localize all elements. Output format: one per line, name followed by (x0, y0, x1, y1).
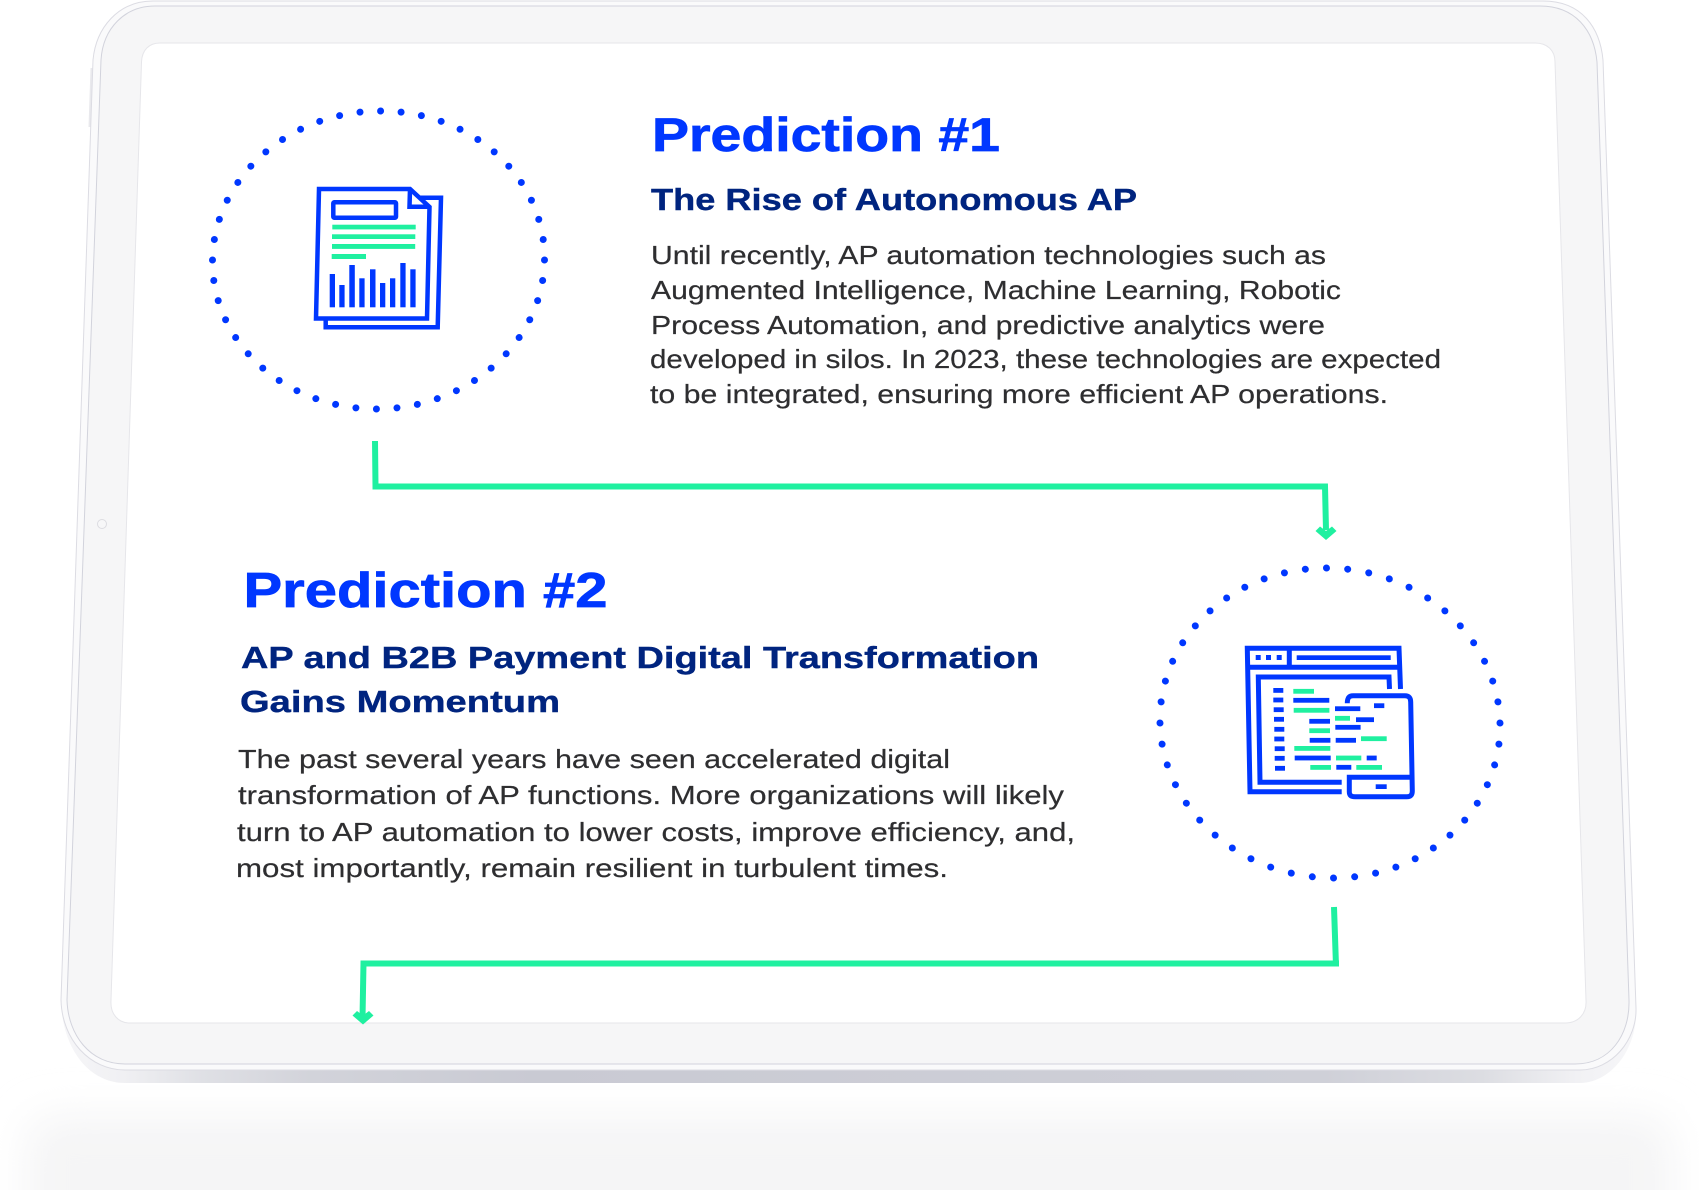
subheading: AP and B2B Payment Digital Transformation Gains Momentum: AP and B2B Payment Digital Transformation (241, 640, 1039, 675)
green code lines (1293, 689, 1387, 770)
body text: prediction 2: transformation of AP functions. More organizations will likely (238, 780, 1064, 810)
bar chart (330, 263, 416, 307)
body text: prediction 1: developed in silos. In 2023, these technologies are expected (650, 344, 1441, 374)
header box (333, 202, 396, 218)
icon: code window with tablet (1247, 648, 1412, 797)
tablet drop shadow (44, 1133, 1654, 1190)
subheading: AP and B2B Payment Digital Transformation Gains Momentum (240, 640, 1039, 719)
green text lines (332, 225, 416, 259)
dotted circle 2 (1156, 568, 1504, 878)
heading: Prediction #1: Prediction #1 (652, 108, 1000, 161)
body text: prediction 1: Process Automation, and predictive analytics were (651, 310, 1325, 340)
inner code panel (1258, 677, 1390, 782)
body text: prediction 1: to be integrated, ensuring more efficient AP operations. (650, 379, 1388, 409)
icon: report document with bar chart (316, 189, 441, 327)
blue code lines (1273, 688, 1384, 771)
body text: prediction 1: Until recently, AP automation technologies such as (651, 240, 1326, 270)
dotted circle 1 (210, 111, 547, 409)
body text: prediction 2: turn to AP automation to lower costs, improve efficiency, and, (237, 817, 1075, 847)
tablet camera (98, 520, 106, 528)
outer browser window (1247, 648, 1400, 792)
arrow: prediction 1 to prediction 2 (375, 441, 1336, 540)
heading: Prediction #2: Prediction #2 (244, 564, 608, 618)
body text: prediction 1 (650, 240, 1441, 409)
tablet screen (111, 43, 1586, 1023)
subheading: AP and B2B Payment Digital Transformation Gains Momentum: Gains Momentum (240, 684, 560, 719)
body text: prediction 2: most importantly, remain resilient in turbulent times. (236, 853, 948, 883)
back page (326, 198, 441, 327)
front page (316, 189, 430, 318)
body text: prediction 1: Augmented Intelligence, Machine Learning, Robotic (651, 275, 1341, 305)
body text: prediction 2: The past several years have seen accelerated digital (238, 744, 950, 774)
tablet side button (90, 68, 92, 127)
tablet home button (1376, 784, 1387, 789)
subheading: The Rise of Autonomous AP: The Rise of Autonomous AP (651, 182, 1137, 217)
body text: prediction 2 (236, 744, 1075, 883)
tablet device outline (1347, 696, 1412, 797)
browser header (1248, 648, 1400, 667)
arrow: prediction 2 onward (352, 907, 1339, 1024)
page fold (410, 189, 430, 207)
